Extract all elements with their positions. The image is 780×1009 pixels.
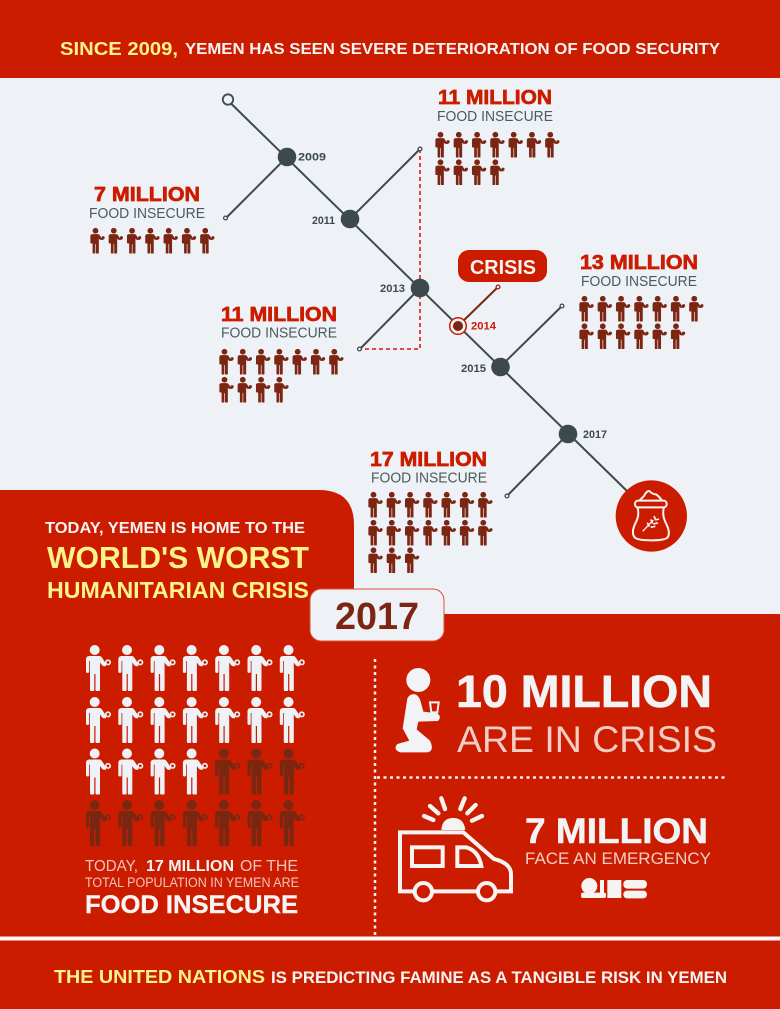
- people row: [90, 228, 214, 254]
- stat: 13 million 2015: [579, 252, 703, 349]
- heading: world's worst humanitarian crisis: WORLD'S WORST: [47, 541, 309, 575]
- start marker: [223, 94, 233, 105]
- stat: 11 million 2013: [219, 304, 343, 402]
- year labels: [298, 152, 607, 441]
- heading: world's worst humanitarian crisis: [45, 520, 309, 603]
- stat: 17 million 2017: [368, 449, 492, 573]
- stat: 7 million emergency: 7 MILLION: [525, 812, 708, 851]
- people rows: [219, 349, 343, 402]
- stat: 11 million 2011: [435, 87, 559, 185]
- branch end markers: [224, 147, 564, 498]
- stat: 10 million in crisis: ARE IN CRISIS: [457, 719, 717, 760]
- stat: 11 million 2013: FOOD INSECURE: [221, 324, 337, 342]
- stat: 10 million in crisis: 10 MILLION: [456, 666, 712, 717]
- stat: 7 million emergency: FACE AN EMERGENCY: [525, 850, 711, 868]
- footer text: IS PREDICTING FAMINE AS A TANGIBLE RISK IN YEMEN: [271, 969, 727, 987]
- icon: ambulance: [400, 798, 511, 900]
- top banner: [0, 0, 780, 78]
- crisis label: CRISIS: [470, 257, 536, 279]
- icon: grain sack: [616, 480, 687, 552]
- 2014 crisis node: [450, 318, 466, 334]
- icon: kneeling person with cup: [396, 668, 440, 752]
- footer text: [54, 967, 727, 987]
- vertical dotted divider: [374, 659, 376, 936]
- year labels: 2009: [298, 152, 326, 164]
- bottom red panel: [0, 490, 780, 1009]
- heading: world's worst humanitarian crisis: HUMANITARIAN CRISIS: [47, 577, 309, 603]
- top banner: YEMEN HAS SEEN SEVERE DETERIORATION OF FOOD SECURITY: [185, 41, 721, 58]
- stat: 17 million 2017: FOOD INSECURE: [371, 470, 487, 486]
- horizontal dotted divider: [377, 776, 727, 779]
- crisis label: [458, 250, 547, 282]
- stat: 7 million 2009: FOOD INSECURE: [89, 205, 205, 222]
- footer text: THE UNITED NATIONS: [54, 967, 265, 987]
- stat: 13 million 2015: FOOD INSECURE: [581, 273, 697, 290]
- crisis branch end: [496, 285, 500, 289]
- text: 17 million food insecure: [85, 858, 299, 919]
- year badge 2017: 2017: [335, 596, 419, 638]
- pictogram: population grid: [86, 645, 305, 846]
- text: 17 million food insecure: 17 MILLION: [146, 858, 234, 875]
- stat: 11 million 2011: 11 MILLION: [438, 87, 552, 109]
- stat: 7 million emergency: [525, 812, 711, 868]
- text: 17 million food insecure: TOTAL POPULATION IN YEMEN ARE: [85, 875, 299, 890]
- stat: 7 million 2009: [89, 184, 214, 254]
- top banner: SINCE 2009,: [60, 39, 178, 59]
- year labels: 2015: [461, 363, 486, 375]
- text: 17 million food insecure: OF THE: [240, 858, 298, 875]
- stat: 10 million in crisis: [456, 666, 717, 760]
- stat: 17 million 2017: 17 MILLION: [370, 449, 487, 471]
- stat: 13 million 2015: 13 MILLION: [580, 252, 698, 274]
- icon: person lying down: [581, 878, 647, 898]
- timeline: [223, 94, 627, 498]
- year labels: 2017: [583, 429, 607, 441]
- white separator: [0, 936, 780, 940]
- year labels: 2014: [471, 320, 497, 332]
- heading: world's worst humanitarian crisis: TODAY, YEMEN IS HOME TO THE: [45, 520, 305, 537]
- stat: 11 million 2013: 11 MILLION: [221, 304, 337, 326]
- stat: 7 million 2009: 7 MILLION: [94, 184, 200, 206]
- year nodes: [278, 148, 577, 443]
- text: 17 million food insecure: TODAY,: [85, 858, 138, 875]
- year labels: 2013: [380, 283, 405, 295]
- year badge 2017: [310, 589, 444, 641]
- text: 17 million food insecure: FOOD INSECURE: [85, 891, 298, 919]
- year labels: 2011: [312, 215, 335, 227]
- stat: 11 million 2011: FOOD INSECURE: [437, 108, 553, 125]
- people rows: [368, 492, 492, 573]
- people rows: [579, 296, 703, 349]
- people rows: [435, 132, 559, 185]
